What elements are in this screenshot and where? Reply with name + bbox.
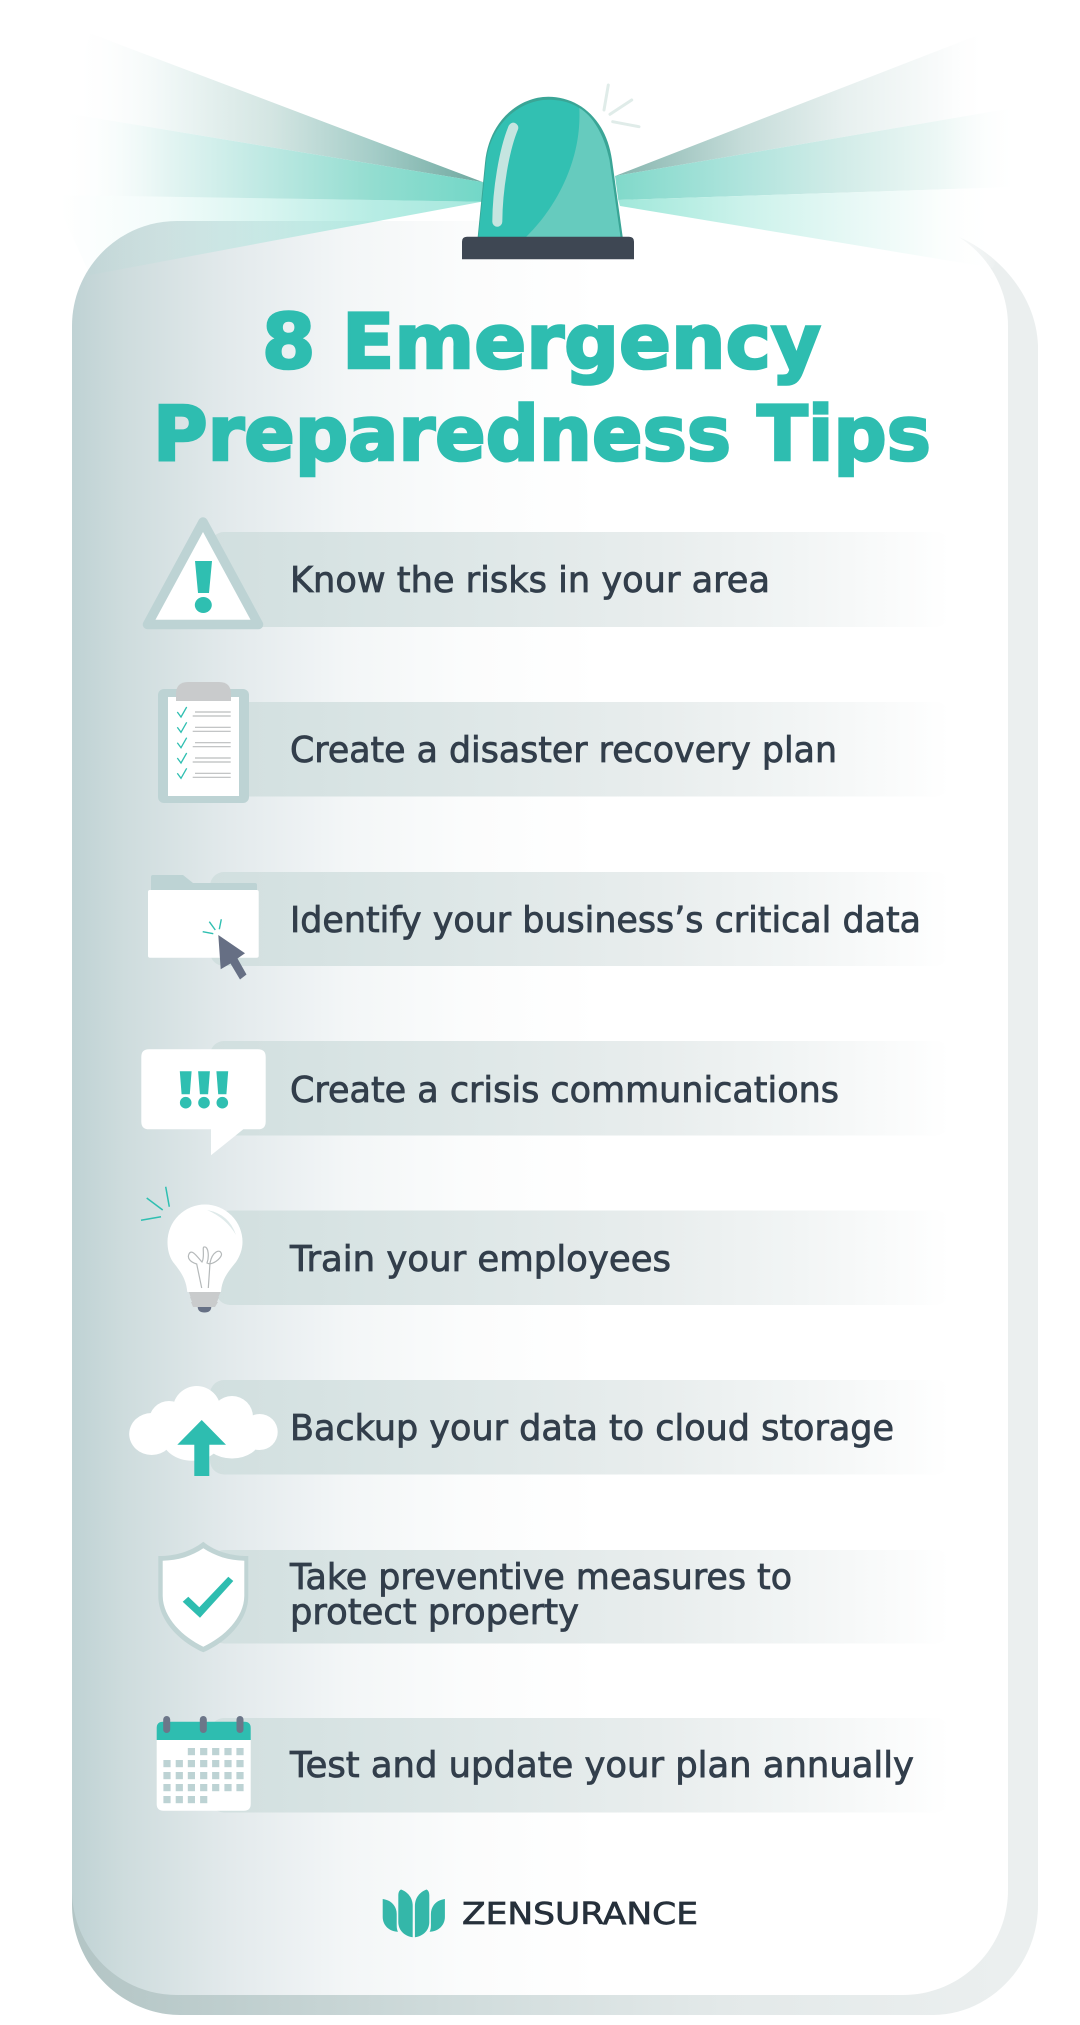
tip 3: critical data: Identify your business’s critical data (290, 900, 921, 941)
tip 4: crisis communications (210, 1041, 950, 1136)
tip 5: train employees (216, 1210, 950, 1305)
title: 8 Emergency (262, 297, 821, 386)
card back shadow (72, 233, 1038, 2015)
tip 5: train employees: Train your employees (289, 1239, 671, 1280)
tip 8: test and update: Test and update your plan annually (289, 1745, 914, 1786)
tip 2: recovery plan (210, 702, 950, 796)
tip 7: preventive measures (210, 1550, 950, 1644)
tip 4: crisis communications: Create a crisis communications (290, 1070, 839, 1111)
card panel (72, 221, 1008, 1995)
icon: calendar (157, 1716, 251, 1811)
title (153, 297, 931, 478)
icon: shield check (158, 1542, 248, 1652)
icon: folder with cursor (148, 875, 259, 980)
light beams right (615, 32, 1023, 268)
tip 8: test and update (210, 1718, 950, 1812)
tip 3: critical data (210, 872, 950, 966)
icon: siren (462, 85, 639, 259)
light beams left (53, 33, 483, 275)
logo: Zensurance: ZENSURANCE (462, 1897, 698, 1932)
tip 7: preventive measures: protect property (290, 1592, 579, 1633)
icon: clipboard checklist (158, 682, 249, 803)
icon: cloud upload (129, 1386, 278, 1476)
icon: speech bubble alert (141, 1049, 266, 1155)
tip 6: cloud backup (210, 1380, 950, 1474)
tip 7: preventive measures: Take preventive measures to (289, 1557, 792, 1598)
tip 1: know the risks: Know the risks in your area (290, 560, 770, 601)
icon: light bulb (141, 1187, 242, 1312)
icon: warning triangle (148, 522, 258, 624)
tip 1: know the risks (210, 532, 950, 627)
tip 6: cloud backup: Backup your data to cloud storage (290, 1408, 894, 1449)
logo: Zensurance (383, 1890, 698, 1937)
title: Preparedness Tips (153, 389, 931, 478)
tip 2: recovery plan: Create a disaster recovery plan (290, 730, 837, 771)
